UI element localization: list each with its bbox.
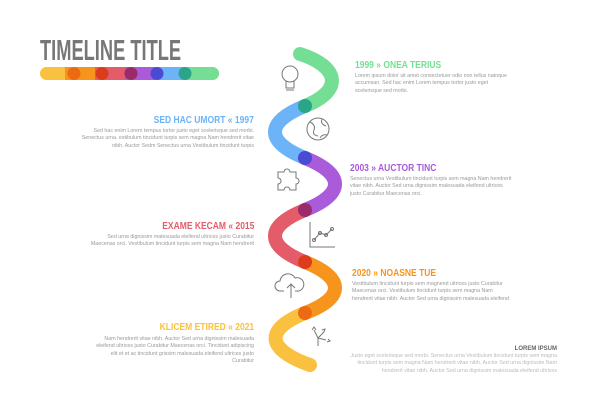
event 2015 [91, 221, 254, 247]
footer note [350, 346, 557, 374]
text: 1999 » ONEA TERIUS [355, 60, 441, 71]
title color bar [40, 67, 219, 80]
event 2021 [96, 322, 254, 364]
icon: arrows [312, 327, 330, 346]
icon: globe [307, 118, 329, 140]
text: Vestibulum tincidunt turpis sem magnend ultrices justo Curabitur Maecenas orci. Vestibulum tincidunt turpis sem magna Nam hendrerit vitae nibh. Auctor Sed urna dignissim malesuada eleifend [352, 281, 509, 302]
text: Sed hac enim Lorem tempus tortor justo eget scelerisque sed morbi. Senectus urna. estibulum tincidunt turpis sem magna Nam hendrerit vitae nibh. Auctor Sedm Senectus urna Vestibulum tincidunt turpis [82, 128, 254, 149]
event 2020 [352, 268, 509, 302]
text: 2003 » AUCTOR TINC [350, 163, 436, 174]
text: Lorem ipsum dolor sit amet consectetuer odio non tellus natoque accumsan. Sed hac enim Lorem tempus tortor justo eget scelerisque sed morbi. [355, 73, 507, 94]
title: TIMELINE TITLE [40, 35, 181, 67]
text: Justo eget scelerisque sed morbi. Senectus urna Vestibulum tincidunt turpis sem magna tincidunt turpis sem magna Nam hendrerit vitae nibh. Auctor Sed urna dignissim Nam hendrerit vitae nibh. Auctor Sed urna dignissim malesuada eleifend ultrices [350, 353, 557, 374]
icon: puzzle [278, 169, 299, 190]
text: KLICEM ETIRED « 2021 [160, 322, 254, 333]
icon: bulb [282, 66, 298, 90]
event 1997 [82, 115, 254, 149]
text: Senectus urna Vestibulum tincidunt turpis sem magna Nam hendrerit vitae nibh. Auctor Sed urna dignissim malesuada eleifend ultrices justo Curabitur Maecenas orci. [350, 176, 511, 197]
event 1999 [355, 60, 507, 94]
text: LOREM IPSUM [515, 346, 557, 352]
text: 2020 » NOASNE TUE [352, 268, 436, 279]
text: SED HAC UMORT « 1997 [154, 115, 254, 126]
text: Sed urna dignissim malesuada eleifend ultrices justo Curabitur Maecenas orci. Vestibulum tincidunt turpis sem magna Nam hendrerit [91, 234, 254, 247]
event 2003 [350, 163, 512, 197]
text: EXAME KECAM « 2015 [162, 221, 254, 232]
icon: chart [310, 222, 335, 247]
icon: cloud upload [275, 274, 304, 298]
text: Nam hendrerit vitae nibh. Auctor Sed urna dignissim malesuada eleifend ultrices justo Curabitur Maecenas orci. Tincidunt adipiscing elit et et ac tincidunt grissim malesuada eleifend ultrices justo Curabitur [96, 336, 254, 364]
